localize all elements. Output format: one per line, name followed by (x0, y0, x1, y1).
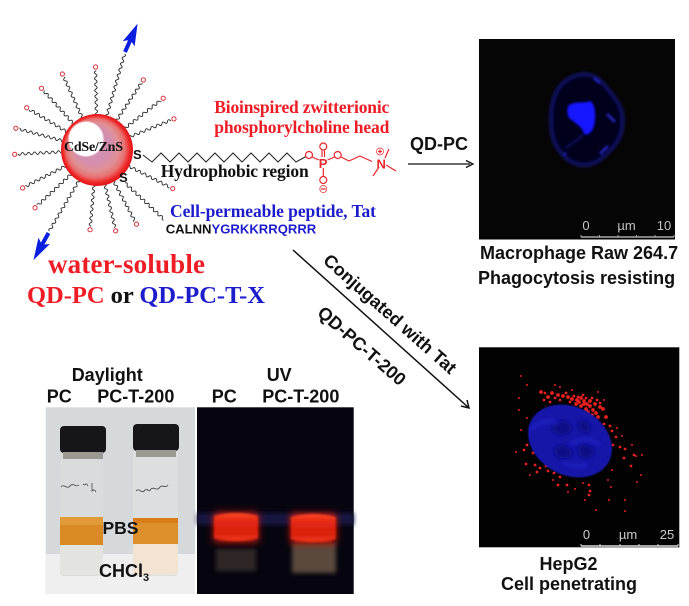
nanoparticle core (61, 114, 133, 186)
label: zwitterionic head: phosphorylcholine head (214, 117, 390, 137)
photo: vials under UV (197, 407, 354, 594)
glow: PC-T-200 (291, 514, 336, 573)
arrow: to macrophage (408, 160, 473, 168)
label: CHCl3: CHCl (99, 561, 143, 581)
caption: macrophage: Phagocytosis resisting (478, 268, 675, 288)
caption: HepG2: HepG2 (539, 554, 598, 574)
ligand brush (0, 14, 224, 286)
heading: daylight: Daylight (72, 365, 143, 385)
blue reflection band (197, 513, 354, 525)
sulfur labels: S (119, 170, 128, 185)
label: zwitterionic head: Bioinspired zwitterionic (214, 97, 390, 117)
arrow: to HepG2 (293, 250, 469, 408)
heading: QD names: QD-PC or QD-PC-T-X (27, 282, 265, 309)
heading: UV: UV (267, 365, 292, 385)
labels: UV vials: PC-T-200 (262, 386, 339, 406)
arrow: upward ligand (119, 21, 144, 55)
red quantum dot puncta (516, 376, 642, 511)
labels: UV vials: PC (212, 386, 237, 406)
peptide sequence: CALNNYGRKKRRQRRR (166, 222, 317, 236)
scale bar: µm (617, 218, 636, 233)
scale bar (581, 218, 674, 237)
phosphorus and nitrogen letters: P (319, 156, 328, 171)
panel: macrophage confocal image (479, 39, 675, 240)
phosphorus and nitrogen letters: N (376, 156, 386, 172)
scale bar: µm (619, 527, 637, 542)
scale bar: 0 (582, 218, 590, 233)
arrow: downward ligand (28, 230, 54, 263)
label: conjugated with Tat: Conjugated with Tat (319, 250, 461, 378)
scale bar: 25 (660, 527, 674, 542)
quantum dot diagram (0, 14, 224, 286)
alkyl chain (143, 153, 306, 162)
label: PBS: PBS (102, 518, 138, 538)
vial: PC (60, 426, 106, 576)
label: hydrophobic region: Hydrophobic region (161, 161, 309, 181)
glow: PC (214, 513, 258, 571)
sulfur labels: S (133, 147, 142, 162)
labels: daylight vials: PC (47, 386, 72, 406)
phosphate head group (306, 143, 396, 192)
nanoparticle core: CdSe/ZnS (64, 140, 123, 155)
label: CHCl3: 3 (143, 572, 149, 584)
cell nucleus (515, 390, 625, 492)
vial: PC-T-200 (133, 424, 179, 576)
sulfur labels (119, 147, 142, 185)
caption: HepG2: Cell penetrating (501, 574, 637, 594)
heading: water-soluble: water-soluble (48, 249, 205, 279)
scale bar: 0 (583, 527, 590, 542)
label: QD-PC-T-200: QD-PC-T-200 (314, 302, 410, 390)
label: cell-permeable peptide: Cell-permeable peptide, Tat (170, 201, 376, 221)
labels: daylight vials: PC-T-200 (97, 386, 174, 406)
scale bar: 10 (657, 218, 671, 233)
caption: macrophage: Macrophage Raw 264.7 (480, 243, 678, 263)
phosphorus and nitrogen letters (319, 156, 386, 172)
scale bar (581, 527, 678, 546)
macrophage cell (551, 74, 623, 165)
photo: vials in daylight (46, 407, 195, 594)
label: QD-PC: QD-PC (410, 134, 468, 154)
panel: HepG2 confocal image (479, 347, 679, 547)
phosphorylcholine ligand structure (143, 143, 396, 192)
